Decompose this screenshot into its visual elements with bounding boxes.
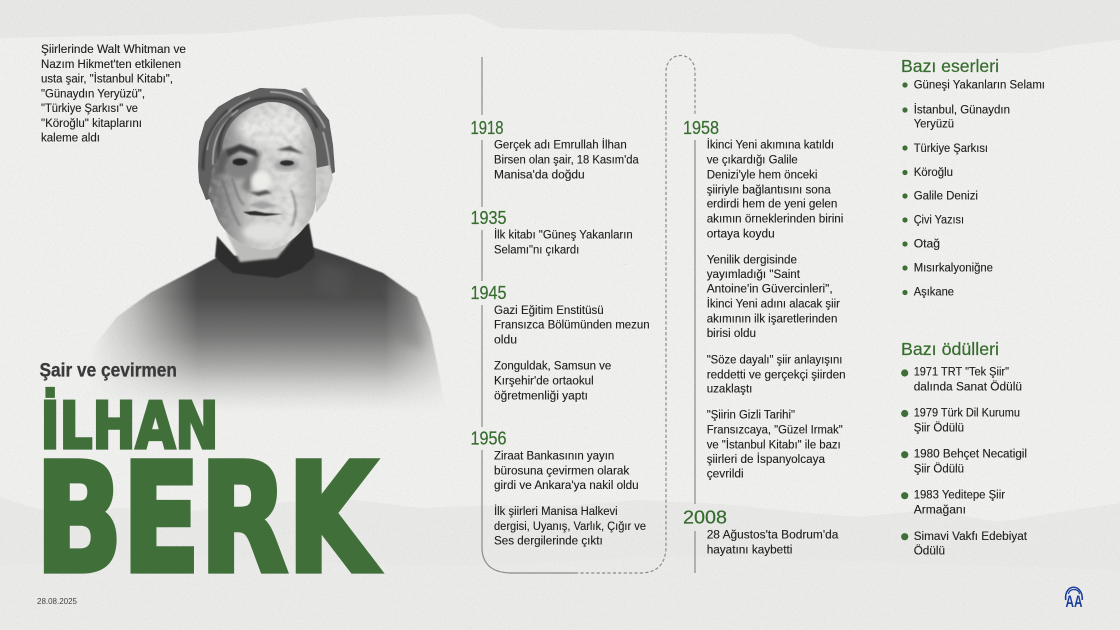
cheek wrinkles — [222, 178, 296, 226]
award items: 1979 Türk Dil Kurumu — [914, 406, 1020, 420]
icon: AA logo — [1066, 587, 1082, 611]
timeline entry: 2008: hayatını kaybetti — [707, 542, 792, 556]
works items: Aşıkane — [914, 285, 954, 299]
timeline entry: 1958: şiiriyle bağlantısını sona — [707, 182, 831, 196]
timeline entry: 1918 — [470, 117, 639, 181]
timeline entry: 1958: Yenilik dergisinde — [707, 252, 797, 266]
nose shade — [241, 150, 261, 194]
timeline entry: 1945: oldu — [494, 332, 517, 346]
timeline entry: 1945: Fransızca Bölümünden mezun — [494, 318, 650, 332]
works items: Galile Denizi — [914, 189, 978, 203]
subtitle: Şair ve çevirmen — [40, 360, 177, 382]
award items: Armağanı — [914, 503, 966, 517]
mouth — [243, 211, 283, 216]
intro text: "Türkiye Şarkısı" ve — [41, 101, 138, 115]
timeline entry: 1958: Denizi'yle hem önceki — [707, 167, 817, 181]
timeline entry: 1956: Ziraat Bankasının yayın — [494, 448, 614, 462]
timeline entry: 1945: Zonguldak, Samsun ve — [494, 359, 611, 373]
timeline entry: 2008: 2008 — [683, 506, 727, 527]
hair dark strands — [203, 98, 317, 170]
timeline entry: 1958: akımın örneklerinden birini — [707, 212, 843, 226]
upper lip shade — [248, 201, 278, 209]
nose base — [249, 190, 272, 196]
timeline entry: 1945: 1945 — [470, 282, 506, 303]
works items: Otağ — [914, 237, 940, 251]
timeline entry: 1958: İkinci Yeni akımına katıldı — [707, 138, 834, 152]
timeline entry: 1958: "Söze dayalı" şiir anlayışını — [707, 352, 842, 366]
timeline entry: 1958: Fransızcaya, "Güzel Irmak" — [707, 422, 843, 436]
works items: Çivi Yazısı — [914, 213, 964, 227]
timeline entry: 1958: erdirdi hem de yeni gelen — [707, 197, 837, 211]
intro text: usta şair, "İstanbul Kitabı", — [41, 72, 173, 86]
timeline entry: 1958: İkinci Yeni adını alacak şiir — [707, 296, 840, 310]
timeline entry: 1956: dergisi, Uyanış, Varlık, Çığır ve — [494, 519, 646, 533]
timeline entry: 1956: 1956 — [470, 427, 506, 448]
timeline entry: 2008: 28 Ağustos'ta Bodrum'da — [707, 527, 838, 541]
award items: 1983 Yeditepe Şiir — [914, 488, 1005, 502]
works items: Köroğlu — [914, 165, 953, 179]
sweater folds — [324, 270, 424, 348]
chin — [243, 223, 287, 241]
timeline entry: 1935: İlk kitabı "Güneş Yakanların — [494, 228, 633, 242]
timeline entry: 1918: Gerçek adı Emrullah İlhan — [494, 138, 627, 152]
award items: 1980 Behçet Necatigil — [914, 447, 1027, 461]
heading: awards: Bazı ödülleri — [901, 339, 999, 359]
temple shade — [214, 148, 232, 176]
panel: works list — [901, 56, 1045, 299]
name: BERK: BERK — [36, 433, 379, 607]
timeline entry: 1945 — [470, 282, 650, 402]
hair wisp — [301, 88, 318, 106]
hair — [198, 88, 335, 200]
timeline entry: 1918: Birsen olan şair, 18 Kasım'da — [494, 153, 639, 167]
intro text: kaleme aldı — [41, 131, 100, 145]
intro text: "Köroğlu" kitaplarını — [41, 116, 142, 130]
timeline entry: 1945: Kırşehir'de ortaokul — [494, 374, 594, 388]
left eye — [225, 157, 255, 179]
right eye — [274, 159, 300, 171]
timeline entry: 1958: ve "İstanbul Kitabı" ile bazı — [707, 437, 841, 451]
timeline entry: 1945: öğretmenliği yaptı — [494, 388, 588, 402]
intro text — [41, 42, 186, 145]
name: İLHAN: İLHAN — [40, 388, 218, 464]
timeline entry: 1956: Ses dergilerinde çıktı — [494, 534, 603, 548]
timeline entry: 1958: Antoine'in Güvercinleri", — [707, 282, 833, 296]
works items: Yeryüzü — [914, 117, 954, 131]
nose tip — [251, 171, 271, 191]
neck collar — [215, 223, 315, 278]
timeline entry: 1958: şiirleri de İspanyolcaya — [707, 452, 825, 466]
left brow — [226, 144, 258, 157]
heading: works: Bazı eserleri — [901, 56, 999, 76]
award items: Şiir Ödülü — [914, 420, 964, 434]
works items — [902, 78, 1045, 299]
works items: Türkiye Şarkısı — [914, 141, 988, 155]
timeline entry: 1958: akımının ilk işaretlerinden — [707, 312, 837, 326]
timeline entry: 1935 — [470, 207, 633, 256]
award items: Şiir Ödülü — [914, 461, 964, 475]
timeline connector — [482, 56, 695, 573]
timeline entry: 1945: Gazi Eğitim Enstitüsü — [494, 303, 604, 317]
timeline entry: 2008 — [683, 506, 838, 556]
hair light strands — [207, 92, 330, 170]
timeline entry: 1935: 1935 — [470, 207, 506, 228]
timeline entry: 1918: Manisa'da doğdu — [494, 167, 585, 181]
works items: Güneşi Yakanların Selamı — [914, 78, 1045, 92]
neck skin — [226, 222, 306, 262]
award items: Simavi Vakfı Edebiyat — [914, 529, 1028, 543]
timeline entry: 1958: "Şiirin Gizli Tarihi" — [707, 408, 795, 422]
timeline entry: 1918: 1918 — [470, 117, 504, 138]
intro text: Nazım Hikmet'ten etkilenen — [41, 57, 181, 71]
portrait photo — [99, 88, 441, 404]
icon: AA logo: AA — [1066, 592, 1082, 611]
timeline entry: 1958: birisi oldu — [707, 326, 756, 340]
timeline entry: 1958: reddetti ve gerçekçi şiirden — [707, 367, 846, 381]
award items — [901, 365, 1028, 558]
intro text: Şiirlerinde Walt Whitman ve — [41, 42, 186, 56]
timeline entry: 1956: bürosuna çevirmen olarak — [494, 463, 630, 477]
timeline entry: 1958: ve çıkardığı Galile — [707, 153, 798, 167]
award items: 1971 TRT "Tek Şiir" — [914, 365, 1009, 379]
timeline entry: 1956: İlk şiirleri Manisa Halkevi — [494, 504, 618, 518]
face and ear — [208, 102, 333, 250]
works items: İstanbul, Günaydın — [914, 102, 1010, 116]
panel: awards list — [901, 339, 1028, 558]
timeline entry: 1958: 1958 — [683, 117, 719, 138]
award items: dalında Sanat Ödülü — [914, 379, 1022, 393]
date: 28.08.2025 — [37, 596, 77, 606]
intro text: "Günaydın Yeryüzü", — [41, 86, 145, 100]
timeline entry: 1935: Selamı"nı çıkardı — [494, 242, 579, 256]
works items: Mısırkalyoniğne — [914, 261, 993, 275]
right brow — [276, 146, 304, 154]
timeline entry: 1956: girdi ve Ankara'ya nakil oldu — [494, 478, 639, 492]
award items: Ödülü — [914, 544, 945, 558]
timeline entry: 1958: çevrildi — [707, 467, 744, 481]
timeline entry: 1958: yayımladığı "Saint — [707, 267, 801, 281]
timeline entry: 1956 — [470, 427, 646, 548]
timeline entry: 1958 — [683, 117, 846, 481]
sweater body — [99, 246, 441, 404]
timeline entry: 1958: uzaklaştı — [707, 382, 752, 396]
timeline entry: 1958: ortaya koydu — [707, 226, 775, 240]
